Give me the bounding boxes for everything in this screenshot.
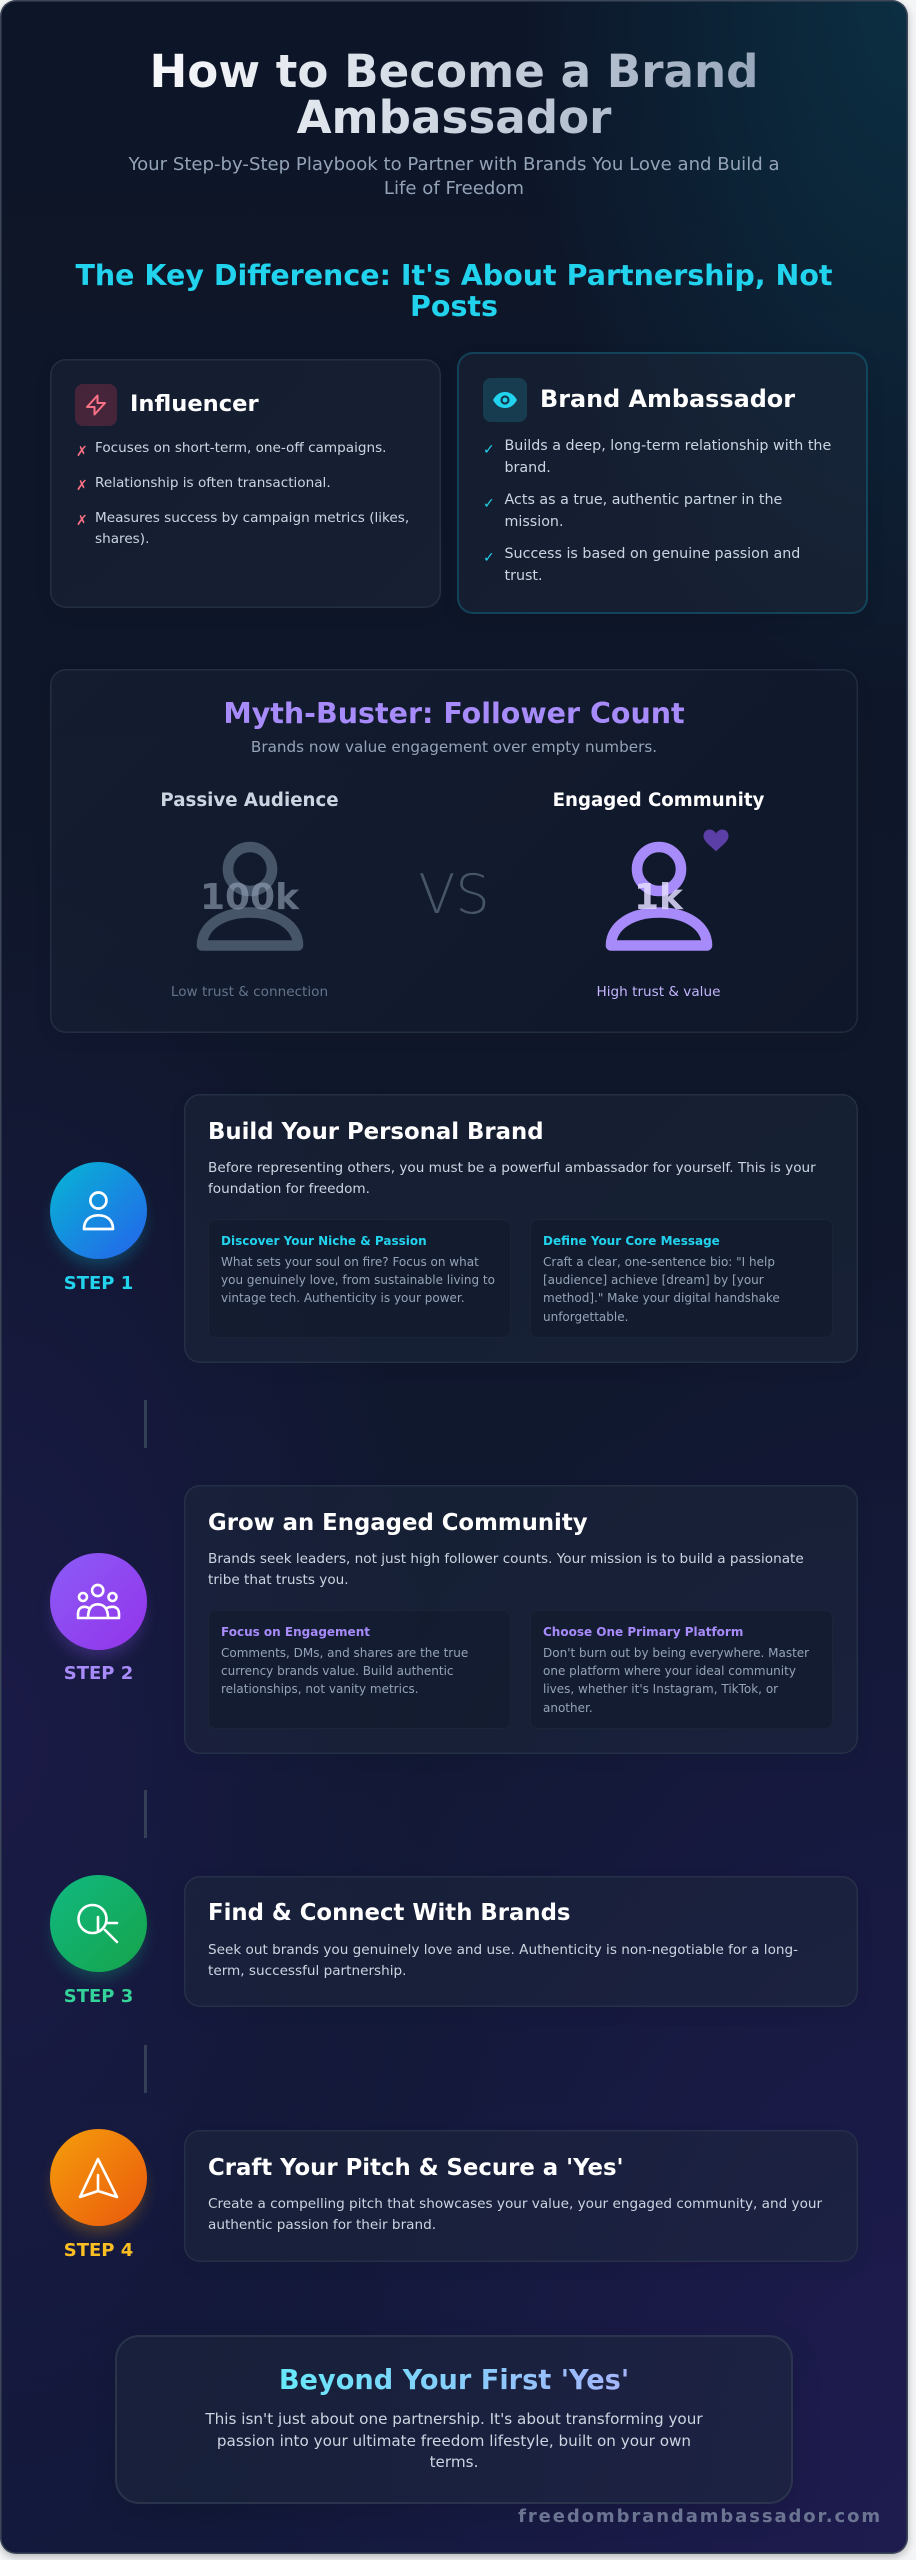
sub-card text — [543, 1255, 780, 1324]
step 1 badge — [48, 1162, 150, 1294]
closing text: passion into your ultimate freedom lifestyle, built on your own — [217, 2432, 691, 2450]
title: Ambassador — [297, 91, 611, 144]
icon: passive person — [196, 842, 304, 951]
panel: brand ambassador — [457, 352, 868, 614]
sub-card text: What sets your soul on fire? Focus on what — [221, 1255, 479, 1269]
list item: Acts as a true, authentic partner in the — [504, 492, 782, 508]
list item: Focuses on short-term, one-off campaigns. — [95, 440, 386, 456]
sub-card heading: Discover Your Niche & Passion — [221, 1234, 427, 1248]
panel: step 3 content — [184, 1876, 858, 2007]
sub-card text: you genuinely love, from sustainable living to — [221, 1273, 495, 1287]
list: ambassador traits — [483, 438, 831, 584]
sub-card text: Comments, DMs, and shares are the true — [221, 1646, 468, 1660]
subtitle — [128, 154, 780, 199]
description: authentic passion for their brand. — [208, 2216, 436, 2232]
caption: high trust: High trust & value — [597, 984, 720, 1000]
sub-card text: another. — [543, 1701, 593, 1715]
check marker: ✓ — [483, 496, 495, 512]
list item — [504, 438, 831, 476]
title — [0, 49, 908, 141]
sub-card text: method]." Make your digital handshake — [543, 1291, 780, 1305]
panel: step 2 content — [184, 1485, 858, 1754]
heading: myth-buster: Myth-Buster: Follower Count — [223, 697, 685, 730]
list item: Relationship is often transactional. — [95, 475, 331, 491]
heading: Craft Your Pitch & Secure a 'Yes' — [208, 2155, 624, 2181]
description: Seek out brands you genuinely love and use. Authenticity is non-negotiable for a long- — [208, 1942, 798, 1958]
step 2 label: STEP 2 — [64, 1663, 133, 1684]
heading: influencer: Influencer — [130, 390, 259, 416]
panel: myth-buster — [50, 669, 858, 1033]
panel: step 1 content — [184, 1094, 858, 1363]
sub-card text — [221, 1255, 495, 1305]
sub-card: focus on engagement — [208, 1610, 511, 1729]
icon: group in circle — [50, 1553, 147, 1650]
step 3 label: STEP 3 — [64, 1986, 133, 2007]
sub-card text: relationships, not vanity metrics. — [221, 1682, 419, 1696]
list item — [95, 510, 409, 547]
description: tribe that trusts you. — [208, 1572, 349, 1588]
icon: engaged person — [606, 842, 712, 951]
panel: closing message — [115, 2335, 793, 2504]
description — [208, 1551, 804, 1588]
sub-card: core message — [530, 1219, 833, 1338]
number: 1k: 1k — [634, 877, 683, 918]
description: Brands seek leaders, not just high follower counts. Your mission is to build a passionate — [208, 1551, 804, 1567]
panel: influencer — [50, 359, 441, 608]
heading: Grow an Engaged Community — [208, 1510, 588, 1536]
cross marker: ✗ — [76, 513, 88, 529]
description: term, successful partnership. — [208, 1962, 406, 1978]
sub-card text: vintage tech. Authenticity is your power. — [221, 1291, 465, 1305]
sub-card text: Craft a clear, one-sentence bio: "I help — [543, 1255, 775, 1269]
heading: brand ambassador: Brand Ambassador — [540, 385, 795, 413]
list item — [504, 492, 782, 530]
sub-card text: currency brands value. Build authentic — [221, 1664, 454, 1678]
sub-card text: [audience] achieve [dream] by [your — [543, 1273, 764, 1287]
check marker: ✓ — [483, 550, 495, 566]
step 2 badge — [47, 1553, 150, 1684]
sub-card heading: Choose One Primary Platform — [543, 1625, 743, 1639]
closing text: terms. — [430, 2453, 478, 2471]
sub-card: niche and passion — [208, 1219, 511, 1338]
step 4 badge — [46, 2129, 151, 2261]
check marker: ✓ — [483, 442, 495, 458]
list item: Builds a deep, long-term relationship with the — [504, 438, 831, 454]
icon: heart — [704, 830, 728, 852]
list item: trust. — [504, 568, 543, 584]
step 4 label: STEP 4 — [64, 2240, 133, 2261]
description: foundation for freedom. — [208, 1181, 370, 1197]
heading: Find & Connect With Brands — [208, 1900, 570, 1926]
heading: key difference: The Key Difference: It's About Partnership, Not — [75, 259, 833, 292]
watermark: freedombrandambassador.com — [518, 2506, 882, 2527]
sub-card text: one platform where your ideal community — [543, 1664, 796, 1678]
sub-card text — [221, 1646, 468, 1696]
closing text: This isn't just about one partnership. It's about transforming your — [205, 2410, 703, 2428]
cross marker: ✗ — [76, 444, 88, 460]
description: Before representing others, you must be a powerful ambassador for yourself. This is your — [208, 1160, 816, 1176]
icon: lightning bolt — [75, 384, 117, 426]
heading: Build Your Personal Brand — [208, 1119, 544, 1145]
sub-card text: lives, whether it's Instagram, TikTok, or — [543, 1682, 778, 1696]
sub-card: primary platform — [530, 1610, 833, 1729]
icon: search in circle — [50, 1875, 147, 1972]
description — [208, 2196, 822, 2232]
list item: brand. — [504, 460, 551, 476]
subtitle: Life of Freedom — [384, 178, 524, 199]
step 3 badge — [48, 1875, 150, 2007]
cross marker: ✗ — [76, 478, 88, 494]
sub-card text: Don't burn out by being everywhere. Master — [543, 1646, 809, 1660]
description: Create a compelling pitch that showcases your value, your engaged community, and your — [208, 2196, 822, 2212]
panel: step 4 content — [184, 2130, 858, 2262]
subtitle: Your Step-by-Step Playbook to Partner with Brands You Love and Build a — [128, 154, 780, 175]
sub-card text — [543, 1646, 810, 1715]
icon: person in circle — [50, 1162, 147, 1259]
sub-card heading: Define Your Core Message — [543, 1234, 720, 1248]
description — [208, 1160, 816, 1197]
label: passive audience: Passive Audience — [160, 790, 339, 810]
heading: key difference — [75, 259, 833, 323]
list item: Success is based on genuine passion and — [504, 546, 800, 562]
sub-card heading: Focus on Engagement — [221, 1625, 370, 1639]
label: engaged community: Engaged Community — [553, 790, 764, 810]
list: influencer traits — [76, 440, 409, 547]
description — [208, 1942, 798, 1978]
list item: mission. — [504, 514, 564, 530]
closing text — [205, 2410, 703, 2471]
list item — [504, 546, 800, 584]
connector line — [144, 2045, 147, 2093]
subheading: Brands now value engagement over empty numbers. — [251, 738, 657, 756]
VS label: VS — [418, 863, 490, 926]
list item: shares). — [95, 531, 149, 547]
closing heading: Beyond Your First 'Yes' — [279, 2365, 629, 2396]
number: 100k: 100k — [200, 877, 299, 918]
list item: Measures success by campaign metrics (likes, — [95, 510, 409, 526]
connector line — [144, 1790, 147, 1838]
icon: eye — [483, 378, 527, 422]
connector line — [144, 1400, 147, 1448]
sub-card text: unforgettable. — [543, 1310, 628, 1324]
step 1 label: STEP 1 — [64, 1273, 133, 1294]
title: How to Become a Brand — [149, 45, 759, 98]
caption: low trust: Low trust & connection — [171, 984, 328, 1000]
heading: key difference: Posts — [410, 290, 498, 323]
icon: paper plane in circle — [50, 2129, 147, 2226]
